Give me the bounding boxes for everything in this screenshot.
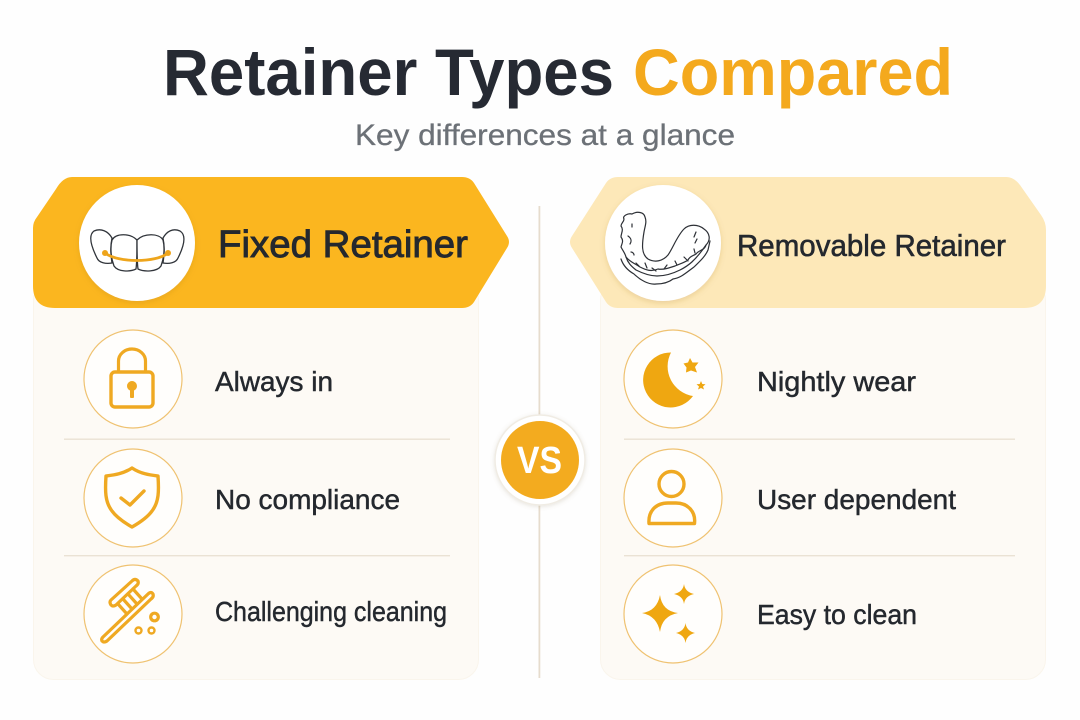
panel: fixed retainer — [33, 177, 509, 680]
center divider line — [538, 206, 540, 678]
icon: clear aligner tray — [605, 185, 721, 301]
banner: fixed retainer — [33, 177, 509, 308]
label: Challenging cleaning — [215, 596, 447, 627]
icon: moon and stars — [624, 330, 722, 428]
row: user dependent — [624, 449, 956, 547]
title — [163, 35, 953, 109]
row: no compliance — [84, 449, 400, 547]
banner label: Fixed Retainer — [218, 224, 468, 266]
title: Retainer Types — [163, 35, 614, 109]
banner label: Removable Retainer — [737, 228, 1006, 263]
vs badge — [495, 415, 585, 505]
banner: removable retainer — [570, 177, 1046, 308]
row: challenging cleaning — [84, 565, 447, 663]
label: Nightly wear — [757, 366, 916, 397]
card: fixed retainer list — [34, 280, 478, 680]
label: User dependent — [757, 484, 956, 515]
icon: shield with check — [84, 449, 182, 547]
subtitle: Key differences at a glance — [355, 119, 735, 152]
title: Compared — [633, 35, 953, 109]
row: always in — [84, 330, 333, 428]
label: No compliance — [215, 484, 400, 515]
icon: toothbrush with particles — [84, 565, 182, 663]
card: removable retainer list — [600, 280, 1046, 680]
icon: fixed retainer on teeth — [79, 185, 195, 301]
icon: user — [624, 449, 722, 547]
vs badge: VS — [517, 440, 562, 482]
icon: sparkles — [624, 565, 722, 663]
label: Easy to clean — [757, 599, 917, 630]
row: nightly wear — [624, 330, 916, 428]
label: Always in — [215, 366, 333, 397]
icon: padlock — [84, 330, 182, 428]
panel: removable retainer — [570, 177, 1046, 680]
row: easy to clean — [624, 565, 917, 663]
